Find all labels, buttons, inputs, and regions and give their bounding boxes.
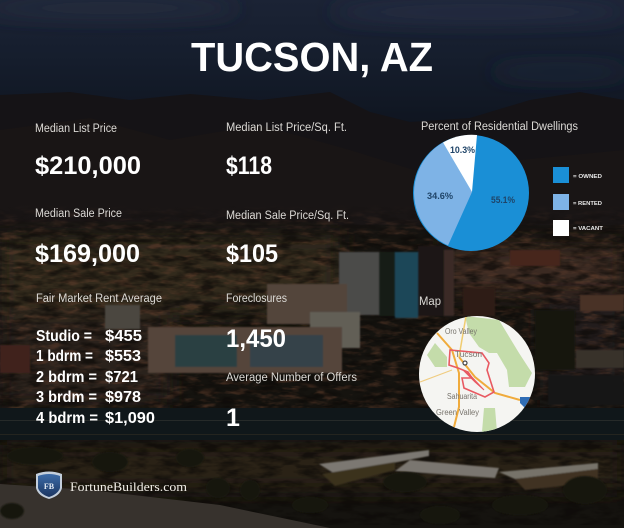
panel: fair market rent: $721	[105, 369, 138, 386]
stat: median sale price per sq ft	[226, 210, 349, 268]
panel: fair market rent: 3 brdm =	[36, 389, 97, 406]
pie chart: percent of residential dwellings	[413, 121, 578, 251]
legend: = RENTED	[573, 201, 602, 207]
stat: median sale price per sq ft: $105	[226, 240, 278, 268]
pie chart: percent of residential dwellings: Percent of Residential Dwellings	[421, 121, 578, 133]
map circle: Tucson	[455, 350, 482, 359]
title: TUCSON, AZ	[191, 34, 433, 80]
map circle: Oro Valley	[445, 327, 477, 336]
stat: median sale price	[35, 208, 140, 268]
city blocks	[0, 246, 624, 405]
lower buildings	[319, 450, 598, 490]
legend	[553, 167, 604, 236]
panel: fair market rent: $1,090	[105, 410, 155, 427]
stat: median list price	[35, 123, 141, 180]
mountains	[0, 92, 624, 215]
stat: average number of offers: Average Number of Offers	[226, 372, 357, 384]
stat: median list price per sq ft	[226, 122, 347, 180]
panel: fair market rent: $978	[105, 389, 141, 406]
stat: median sale price per sq ft: Median Sale Price/Sq. Ft.	[226, 210, 349, 222]
legend: = OWNED	[573, 174, 602, 180]
stat: median list price per sq ft: Median List Price/Sq. Ft.	[226, 122, 347, 134]
stat: median list price: Median List Price	[35, 123, 117, 135]
logo: FortuneBuilders.com	[36, 472, 187, 499]
map circle: Green Valley	[436, 408, 479, 417]
stat: average number of offers: 1	[226, 404, 240, 432]
panel: fair market rent: 1 bdrm =	[36, 348, 93, 365]
map label: Map	[419, 296, 441, 308]
logo: FortuneBuilders.com: FortuneBuilders.com	[70, 479, 187, 494]
stat: average number of offers	[226, 372, 357, 432]
pie chart: percent of residential dwellings: 55.1%	[491, 195, 515, 205]
stat: median sale price: $169,000	[35, 240, 140, 268]
icon: FB shield: FB	[44, 482, 55, 491]
map circle: Sahuarita	[447, 392, 477, 401]
legend: = VACANT	[573, 226, 604, 232]
panel: fair market rent: 4 bdrm =	[36, 410, 98, 427]
road band	[0, 408, 624, 440]
stat: median list price: $210,000	[35, 152, 141, 180]
stat: median list price per sq ft: $118	[226, 152, 272, 180]
panel: fair market rent: Studio =	[36, 328, 92, 345]
texture: distant city noise	[0, 205, 624, 410]
stat: foreclosures	[226, 293, 287, 353]
pie chart: percent of residential dwellings: 10.3%	[450, 145, 475, 155]
texture: dark city shadows	[0, 205, 624, 525]
stat: foreclosures: 1,450	[226, 325, 286, 353]
panel: fair market rent: 2 bdrm =	[36, 369, 97, 386]
panel: fair market rent: Fair Market Rent Average	[36, 293, 162, 305]
map circle	[419, 316, 535, 432]
pie chart: percent of residential dwellings: 34.6%	[427, 191, 453, 201]
icon: FB shield	[36, 472, 62, 499]
panel: fair market rent: $455	[105, 328, 142, 345]
stat: foreclosures: Foreclosures	[226, 293, 287, 305]
ground and bushes	[0, 484, 330, 528]
panel: fair market rent: $553	[105, 348, 141, 365]
panel: fair market rent	[36, 293, 162, 427]
stat: median sale price: Median Sale Price	[35, 208, 122, 220]
